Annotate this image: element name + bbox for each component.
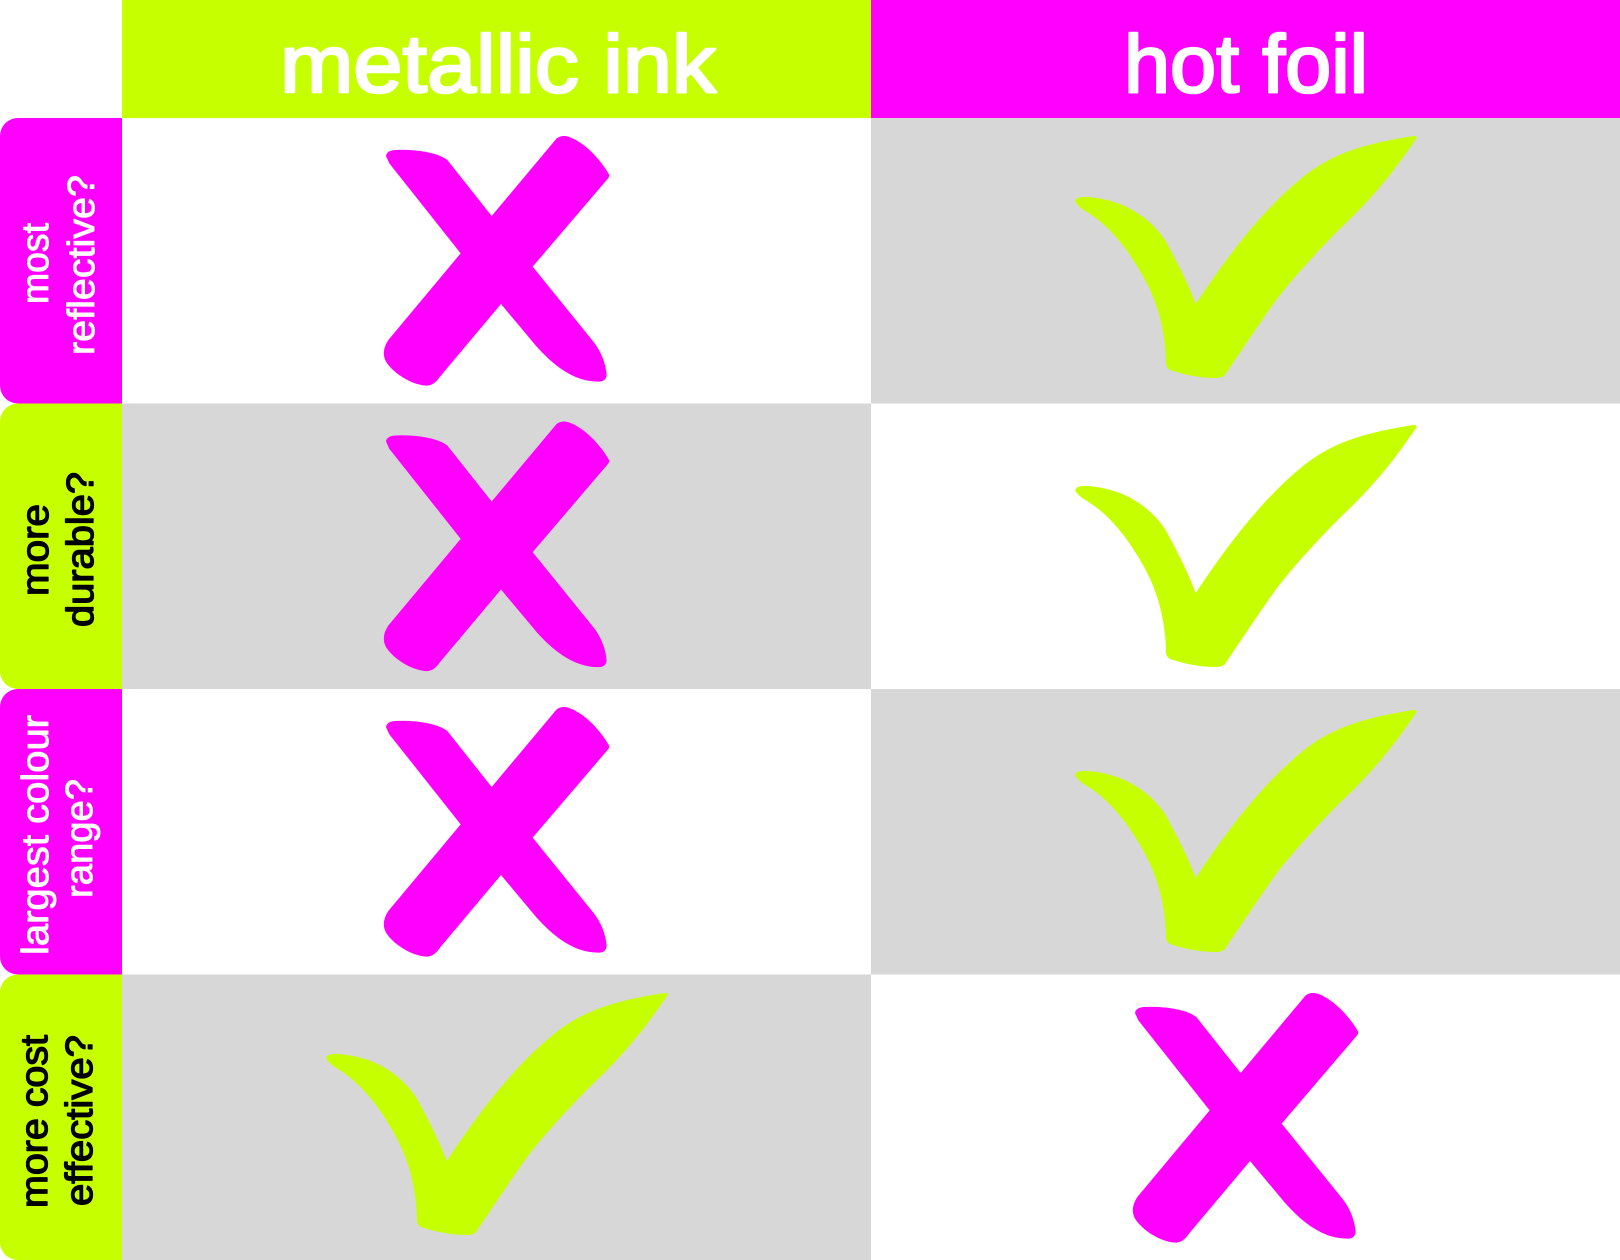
row 1 label: most reflective?: most [15, 223, 57, 304]
row 2 label: more durable?: more [15, 504, 57, 596]
header: metallic ink [122, 0, 871, 118]
row 3 label: largest colour range?: largest colour [15, 715, 57, 955]
row 1 cell: metallic ink, cross [122, 118, 871, 404]
row 3 label: largest colour range? [0, 689, 142, 974]
row 3 cell: metallic ink, cross [122, 689, 871, 974]
row 4 label: more cost effective?: more cost [14, 1035, 56, 1208]
row 4 label: more cost effective?: effective? [59, 1035, 101, 1206]
row 1 label: most reflective? [0, 118, 142, 404]
row 2 label: more durable? [0, 404, 141, 689]
header: hot foil [871, 0, 1620, 118]
header: metallic ink: metallic ink [280, 19, 717, 110]
row 2 label: more durable?: durable? [60, 472, 102, 627]
row 2 cell: metallic ink, cross [122, 404, 871, 689]
row 4 cell: hot foil, cross [871, 974, 1620, 1260]
row 1 label: most reflective?: reflective? [61, 175, 103, 355]
row 4 cell: metallic ink, tick [122, 974, 871, 1260]
row 4 label: more cost effective? [0, 974, 142, 1260]
row 3 label: largest colour range?: range? [59, 779, 101, 898]
row 3 cell: hot foil, tick [871, 689, 1620, 974]
row 2 cell: hot foil, tick [871, 404, 1620, 689]
row 1 cell: hot foil, tick [871, 118, 1620, 404]
header: hot foil: hot foil [1124, 19, 1368, 110]
